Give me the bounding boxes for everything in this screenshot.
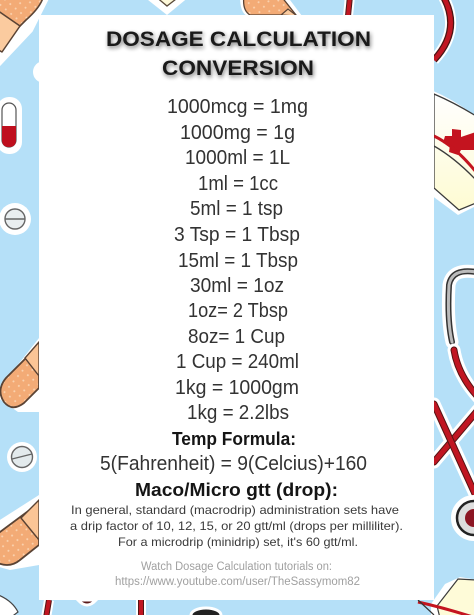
icon: bandage top center [240,0,302,16]
conversion list: 5ml = 1 tsp [190,198,283,220]
footer link: Watch Dosage Calculation tutorials on: [141,561,332,573]
drip factor paragraph: In general, standard (macrodrip) administration sets have [71,503,399,517]
footer link: https://www.youtube.com/user/TheSassymom82 [115,576,360,588]
conversion list: 1kg = 1000gm [175,377,299,399]
icon: stethoscope right [434,271,474,539]
icon: round tablet left lower [7,442,37,472]
icon: bandage top left [0,0,50,66]
conversion list: 1oz= 2 Tbsp [188,300,288,322]
title: DOSAGE CALCULATION [107,29,372,53]
drip factor paragraph: For a microdrip (minidrip) set, it's 60 gtt/ml. [118,535,358,549]
conversion list: 3 Tsp = 1 Tbsp [174,224,300,246]
conversion list: 15ml = 1 Tbsp [178,250,298,272]
conversion list: 30ml = 1oz [190,275,284,297]
conversion list: 1000ml = 1L [185,147,290,169]
icon: nurse hat bottom right [418,577,474,615]
icon: pill top center [143,0,190,15]
footer link [115,561,360,588]
icon: round tablet left upper [0,203,31,235]
conversion list: 8oz= 1 Cup [188,326,285,348]
drip factor paragraph [70,503,403,549]
icon: bandage left middle [0,338,39,412]
title: CONVERSION [162,56,314,80]
temp formula text: 5(Fahrenheit) = 9(Celcius)+160 [100,453,367,475]
title: CONVERSION [163,58,315,82]
title [106,27,372,82]
conversion list: 1kg = 2.2lbs [187,402,289,424]
drip factor paragraph: a drip factor of 10, 12, 15, or 20 gtt/ml (drops per milliliter). [70,519,403,533]
title: DOSAGE CALCULATION [106,27,371,51]
icon: nurse hat right [431,90,474,215]
icon: stethoscope bottom [46,600,221,615]
icon: bandage left lower [0,495,39,570]
icon: nurse hat bottom left [0,594,18,615]
panel: white card [39,15,434,600]
heading: temp formula: Temp Formula: [172,428,296,449]
icon: pill left capsule [0,97,22,154]
icon: tablet edge behind card [33,61,55,83]
heading: macro micro gtt: Maco/Micro gtt (drop): [135,479,338,500]
conversion list: 1000mg = 1g [180,122,295,144]
conversion list [167,96,308,424]
conversion list: 1ml = 1cc [198,173,278,195]
icon: stethoscope tube top [348,0,451,60]
conversion list: 1 Cup = 240ml [176,351,299,373]
conversion list: 1000mcg = 1mg [167,96,308,118]
